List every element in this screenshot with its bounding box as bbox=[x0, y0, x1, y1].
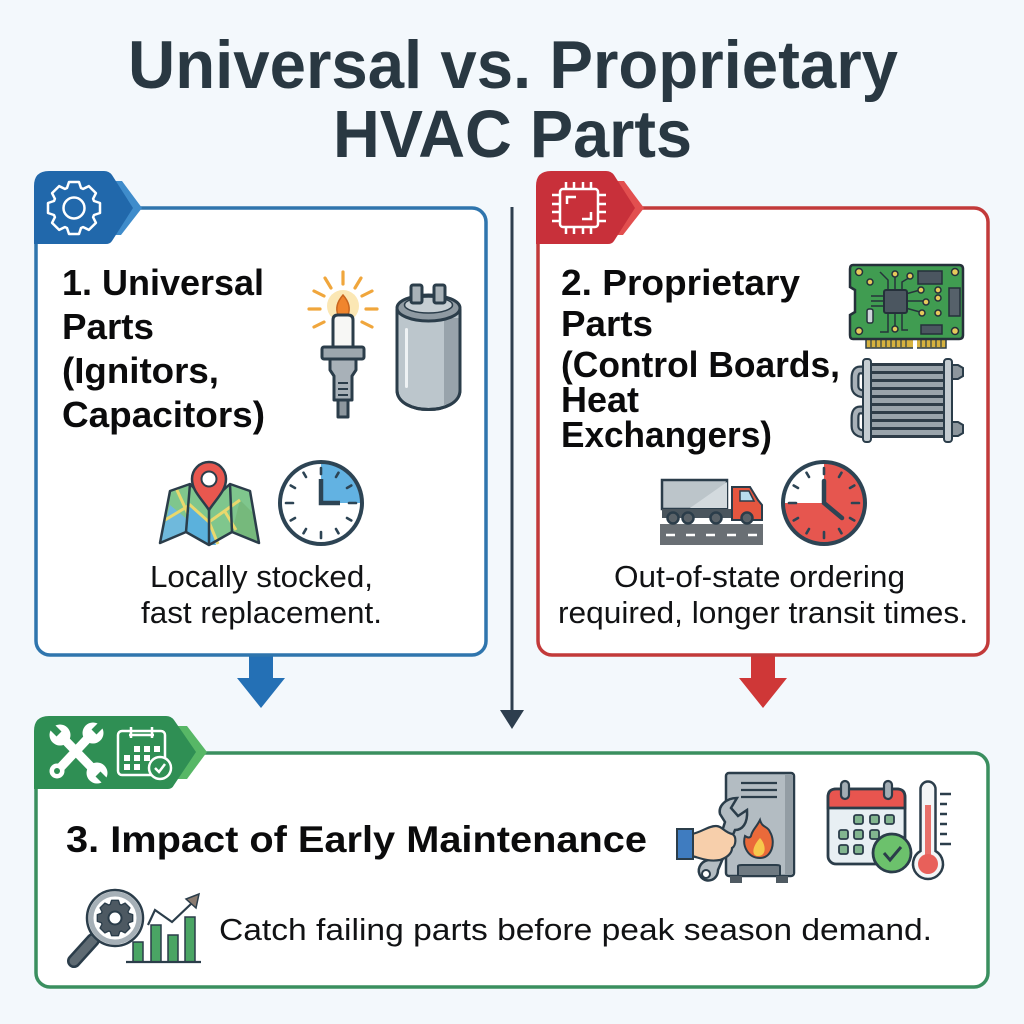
icon: heat exchanger bbox=[855, 359, 963, 442]
icon: circuit board bbox=[850, 265, 963, 350]
chart: rising bars bbox=[126, 894, 201, 962]
heading: impact of early maintenance: 3. Impact of Early Maintenance bbox=[66, 819, 647, 860]
icon: map with pin bbox=[160, 462, 259, 545]
icon: furnace with hand and wrench bbox=[677, 773, 794, 883]
title bbox=[128, 27, 898, 172]
text: locally stocked: Locally stocked, bbox=[150, 559, 373, 594]
icon: calendar with check bbox=[828, 781, 911, 872]
text: out of state ordering bbox=[558, 559, 968, 630]
icon: chip bbox=[552, 182, 606, 234]
panel: proprietary parts bbox=[536, 171, 988, 655]
title: HVAC Parts bbox=[333, 97, 692, 172]
icon: magnifier with gear bbox=[74, 890, 143, 961]
center divider arrow bbox=[500, 207, 524, 729]
text: locally stocked bbox=[141, 559, 382, 630]
heading: proprietary parts: 2. Proprietary bbox=[561, 262, 800, 303]
icon: capacitor bbox=[397, 285, 460, 410]
heading: universal parts: Parts bbox=[62, 306, 154, 347]
icon: clock with quarter shaded bbox=[280, 462, 362, 544]
text: out of state ordering: Out-of-state ordering bbox=[614, 559, 905, 594]
heading: universal parts bbox=[62, 262, 265, 435]
icon: thermometer bbox=[913, 782, 951, 879]
icon: calendar check bbox=[118, 727, 171, 779]
title: Universal vs. Proprietary bbox=[128, 27, 898, 103]
heading: universal parts: 1. Universal bbox=[62, 262, 264, 303]
arrow: blue down bbox=[237, 656, 285, 708]
text: out of state ordering: required, longer transit times. bbox=[558, 595, 968, 630]
heading: universal parts: Capacitors) bbox=[62, 394, 265, 435]
badge: gear tab bbox=[34, 171, 142, 244]
heading: proprietary parts: Exchangers) bbox=[561, 414, 772, 455]
badge: tools tab bbox=[34, 716, 207, 789]
heading: proprietary parts bbox=[561, 262, 840, 455]
heading: proprietary parts: (Control Boards, bbox=[561, 344, 840, 385]
icon: truck on road bbox=[660, 480, 763, 545]
heading: proprietary parts: Heat bbox=[561, 379, 639, 420]
badge: chip tab bbox=[536, 171, 644, 244]
heading: proprietary parts: Parts bbox=[561, 303, 653, 344]
text: catch failing parts: Catch failing parts before peak season demand. bbox=[219, 912, 932, 947]
panel: universal parts bbox=[34, 171, 486, 655]
panel: impact of early maintenance bbox=[34, 716, 988, 987]
icon: crossed wrenches bbox=[47, 719, 110, 786]
heading: universal parts: (Ignitors, bbox=[62, 350, 219, 391]
icon: gear bbox=[48, 182, 100, 234]
text: locally stocked: fast replacement. bbox=[141, 595, 382, 630]
arrow: red down bbox=[739, 656, 787, 708]
icon: clock mostly shaded bbox=[783, 462, 865, 544]
icon: ignitor bbox=[309, 272, 377, 417]
